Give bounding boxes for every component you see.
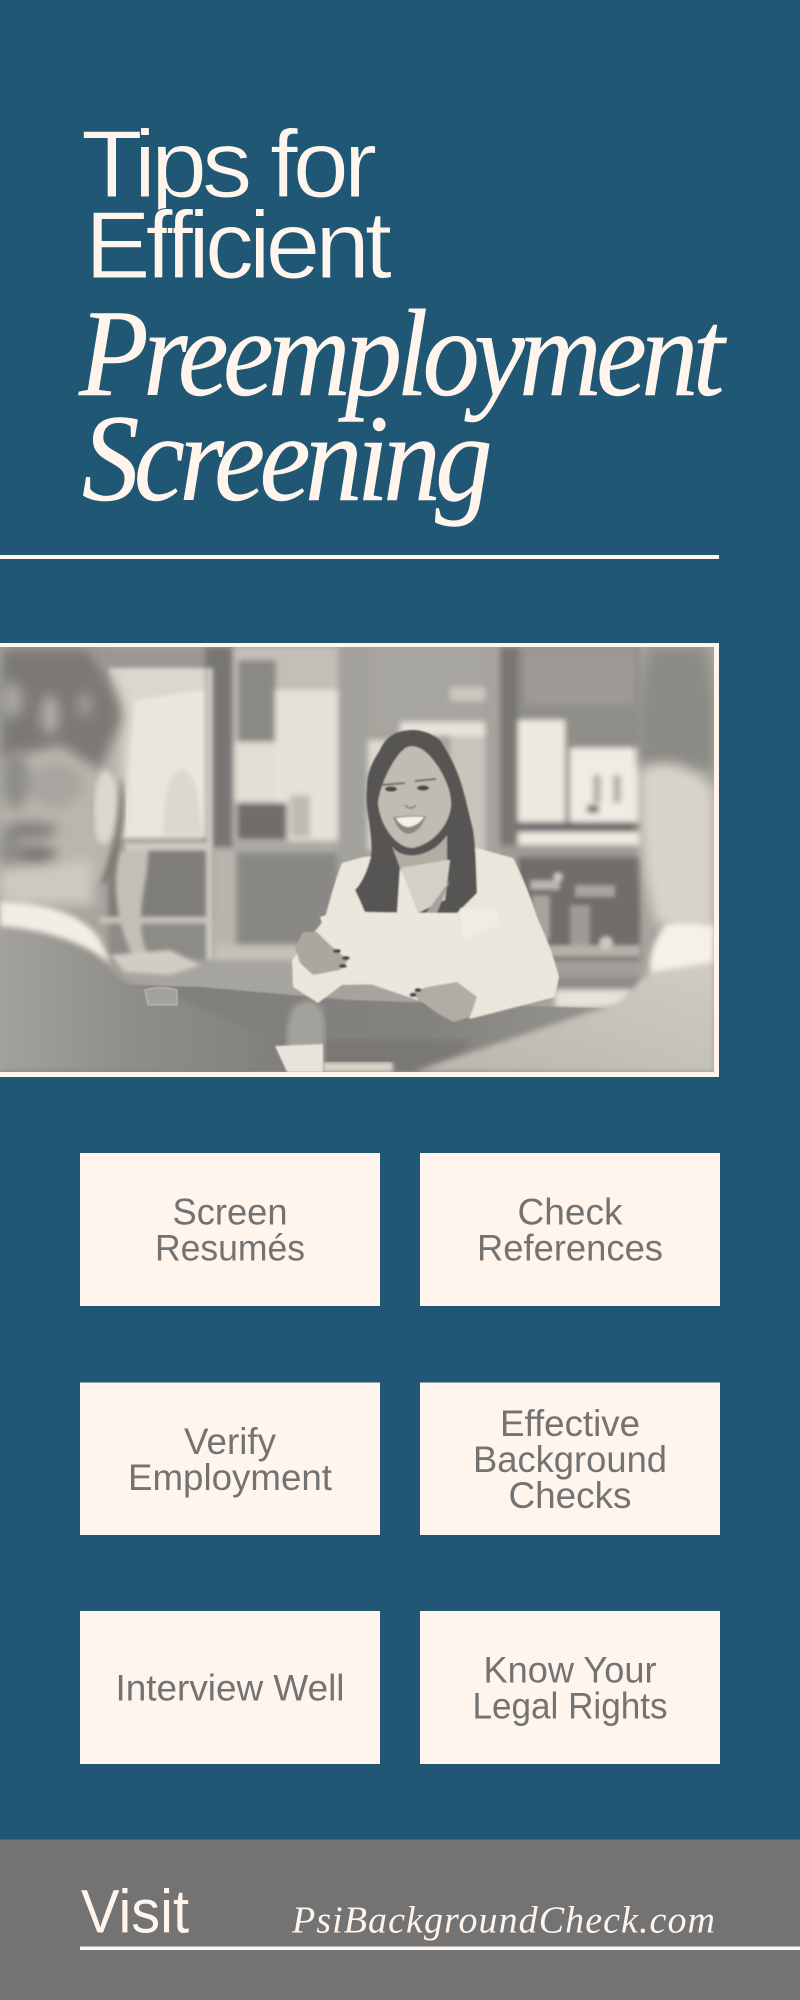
card: Effective Background Checks: Effective <box>500 1403 640 1444</box>
visit label: Visit <box>81 1878 189 1946</box>
whiteboard and easel <box>100 668 213 975</box>
reflections on table <box>287 1001 325 1072</box>
card: Know Your Legal Rights: Know Your <box>484 1650 656 1690</box>
title: Preemployment <box>78 285 727 422</box>
hair and head <box>0 647 123 890</box>
blurred office background <box>90 647 640 1008</box>
title: Screening <box>82 390 490 527</box>
card: Verify Employment: Employment <box>128 1457 333 1498</box>
card: Verify Employment: Verify <box>184 1421 276 1462</box>
title: Tips for <box>81 111 376 218</box>
card: Interview Well <box>80 1611 380 1764</box>
website url: PsiBackgroundCheck.com <box>291 1900 715 1942</box>
footer band <box>0 1840 800 2000</box>
table <box>1 985 605 1072</box>
left person <box>0 647 210 1072</box>
title <box>78 111 727 527</box>
woman <box>292 730 559 1022</box>
card: Interview Well: Interview Well <box>116 1668 344 1708</box>
jacket <box>2 936 210 1072</box>
card: Check References <box>420 1153 720 1306</box>
card: Screen Resumés: Resumés <box>155 1228 305 1268</box>
card: Screen Resumés: Screen <box>172 1192 288 1232</box>
card: Effective Background Checks: Background <box>473 1439 667 1480</box>
card: Effective Background Checks <box>420 1382 720 1535</box>
footer rule <box>80 1946 800 1950</box>
blurred bottle highlights <box>520 872 640 957</box>
card: Verify Employment <box>80 1382 380 1535</box>
ear <box>94 770 118 844</box>
card: Know Your Legal Rights <box>420 1611 720 1764</box>
glass <box>145 988 177 1005</box>
card: Check References: Check <box>518 1192 623 1232</box>
card: Screen Resumés <box>80 1153 380 1306</box>
card: Know Your Legal Rights: Legal Rights <box>472 1686 668 1726</box>
card: Check References: References <box>477 1228 663 1268</box>
collar <box>0 902 112 965</box>
title: Efficient <box>85 192 391 299</box>
photo: interview scene <box>0 643 719 1077</box>
title rule <box>0 555 719 559</box>
mug <box>275 1044 323 1072</box>
card: Effective Background Checks: Checks <box>508 1475 632 1516</box>
right person <box>638 647 714 930</box>
